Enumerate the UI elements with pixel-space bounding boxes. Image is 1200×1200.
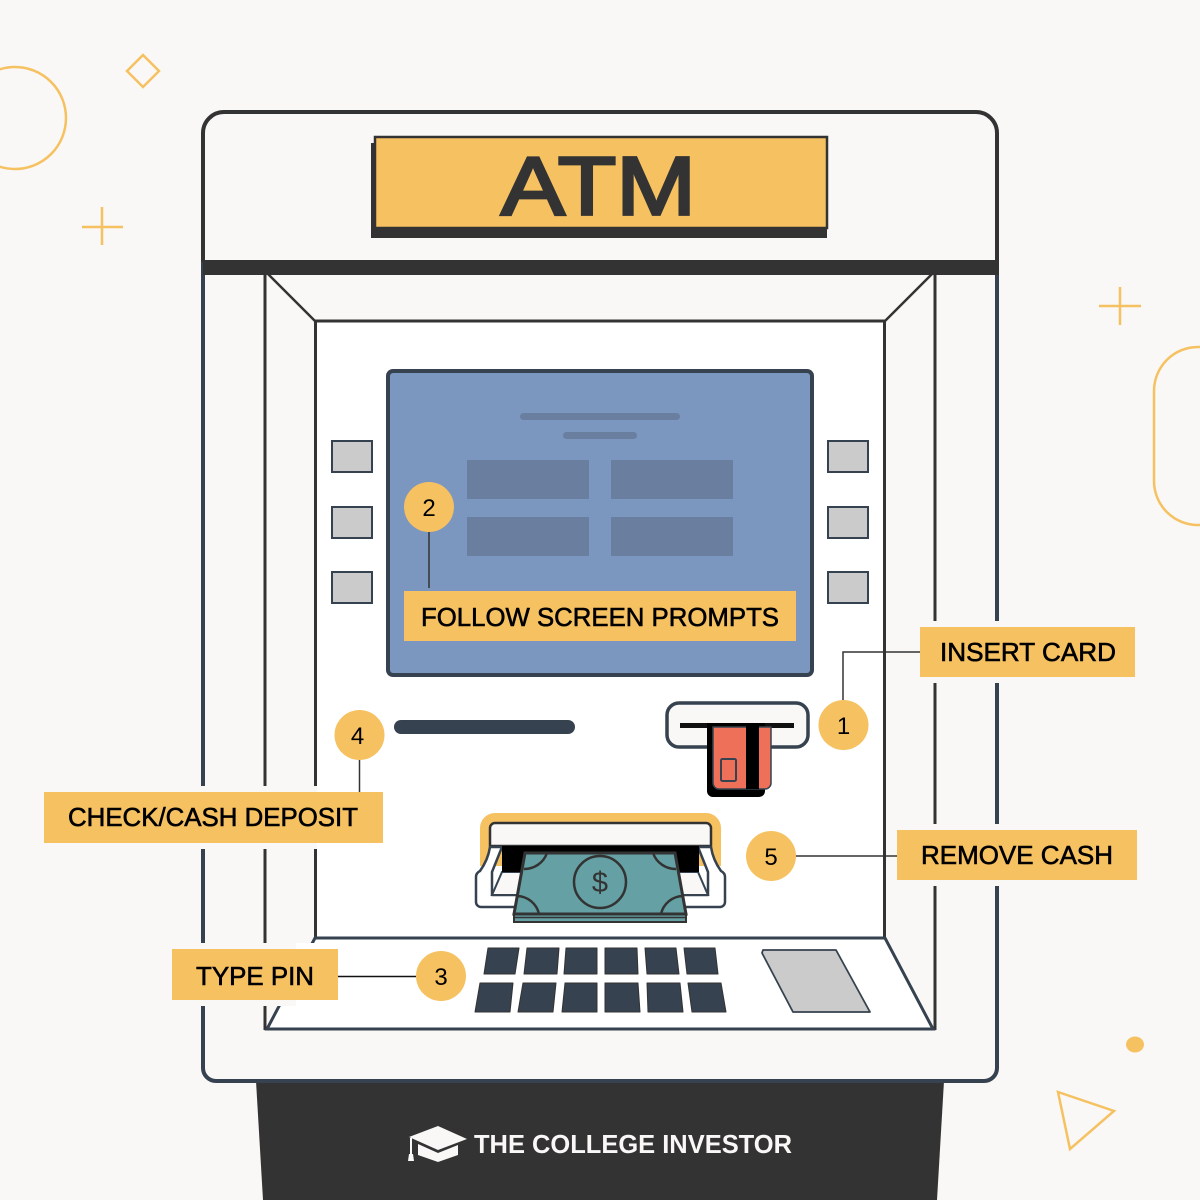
step 5: remove cash: 5 bbox=[764, 844, 778, 871]
left side buttons bbox=[332, 441, 372, 603]
step 3: type pin: 3 bbox=[434, 964, 448, 991]
step 3: type pin: TYPE PIN bbox=[196, 961, 314, 991]
step 5: remove cash bbox=[746, 830, 1137, 881]
step 1: insert card bbox=[818, 627, 1135, 750]
ATM sign: ATM bbox=[501, 140, 696, 232]
keypad shelf bbox=[267, 938, 933, 1029]
banknote stack bbox=[514, 853, 686, 922]
step 4: check/cash deposit: CHECK/CASH DEPOSIT bbox=[68, 802, 358, 832]
label halos bbox=[38, 621, 1143, 1006]
keypad bbox=[475, 948, 726, 1012]
deposit slot bbox=[394, 720, 575, 734]
step 2: follow screen prompts: 2 bbox=[422, 495, 436, 522]
step 1: insert card: 1 bbox=[837, 713, 850, 740]
ATM sign bbox=[371, 137, 827, 238]
screen bbox=[388, 371, 812, 675]
step 4: check/cash deposit: 4 bbox=[351, 723, 364, 750]
step 4: check/cash deposit bbox=[44, 710, 384, 843]
ATM recess frame bbox=[265, 273, 935, 1030]
connector lines bbox=[338, 532, 920, 976]
cash dispenser bbox=[476, 813, 725, 922]
logo wordmark: THE COLLEGE INVESTOR bbox=[474, 1129, 792, 1159]
main machine panel bbox=[316, 321, 884, 938]
step 1: insert card: INSERT CARD bbox=[940, 637, 1116, 667]
card reader pad bbox=[762, 950, 870, 1012]
step 2: follow screen prompts: FOLLOW SCREEN PROMPTS bbox=[421, 602, 779, 632]
right side buttons bbox=[828, 441, 868, 603]
step 5: remove cash: REMOVE CASH bbox=[921, 840, 1113, 870]
logo: graduation cap icon bbox=[408, 1126, 467, 1162]
step 2: follow screen prompts bbox=[404, 482, 796, 641]
banknote stack: $ bbox=[592, 867, 608, 899]
ATM stand base bbox=[256, 1081, 944, 1200]
step 3: type pin bbox=[172, 949, 466, 1001]
card slot with card bbox=[667, 703, 808, 797]
ATM outer body bbox=[203, 112, 999, 1081]
